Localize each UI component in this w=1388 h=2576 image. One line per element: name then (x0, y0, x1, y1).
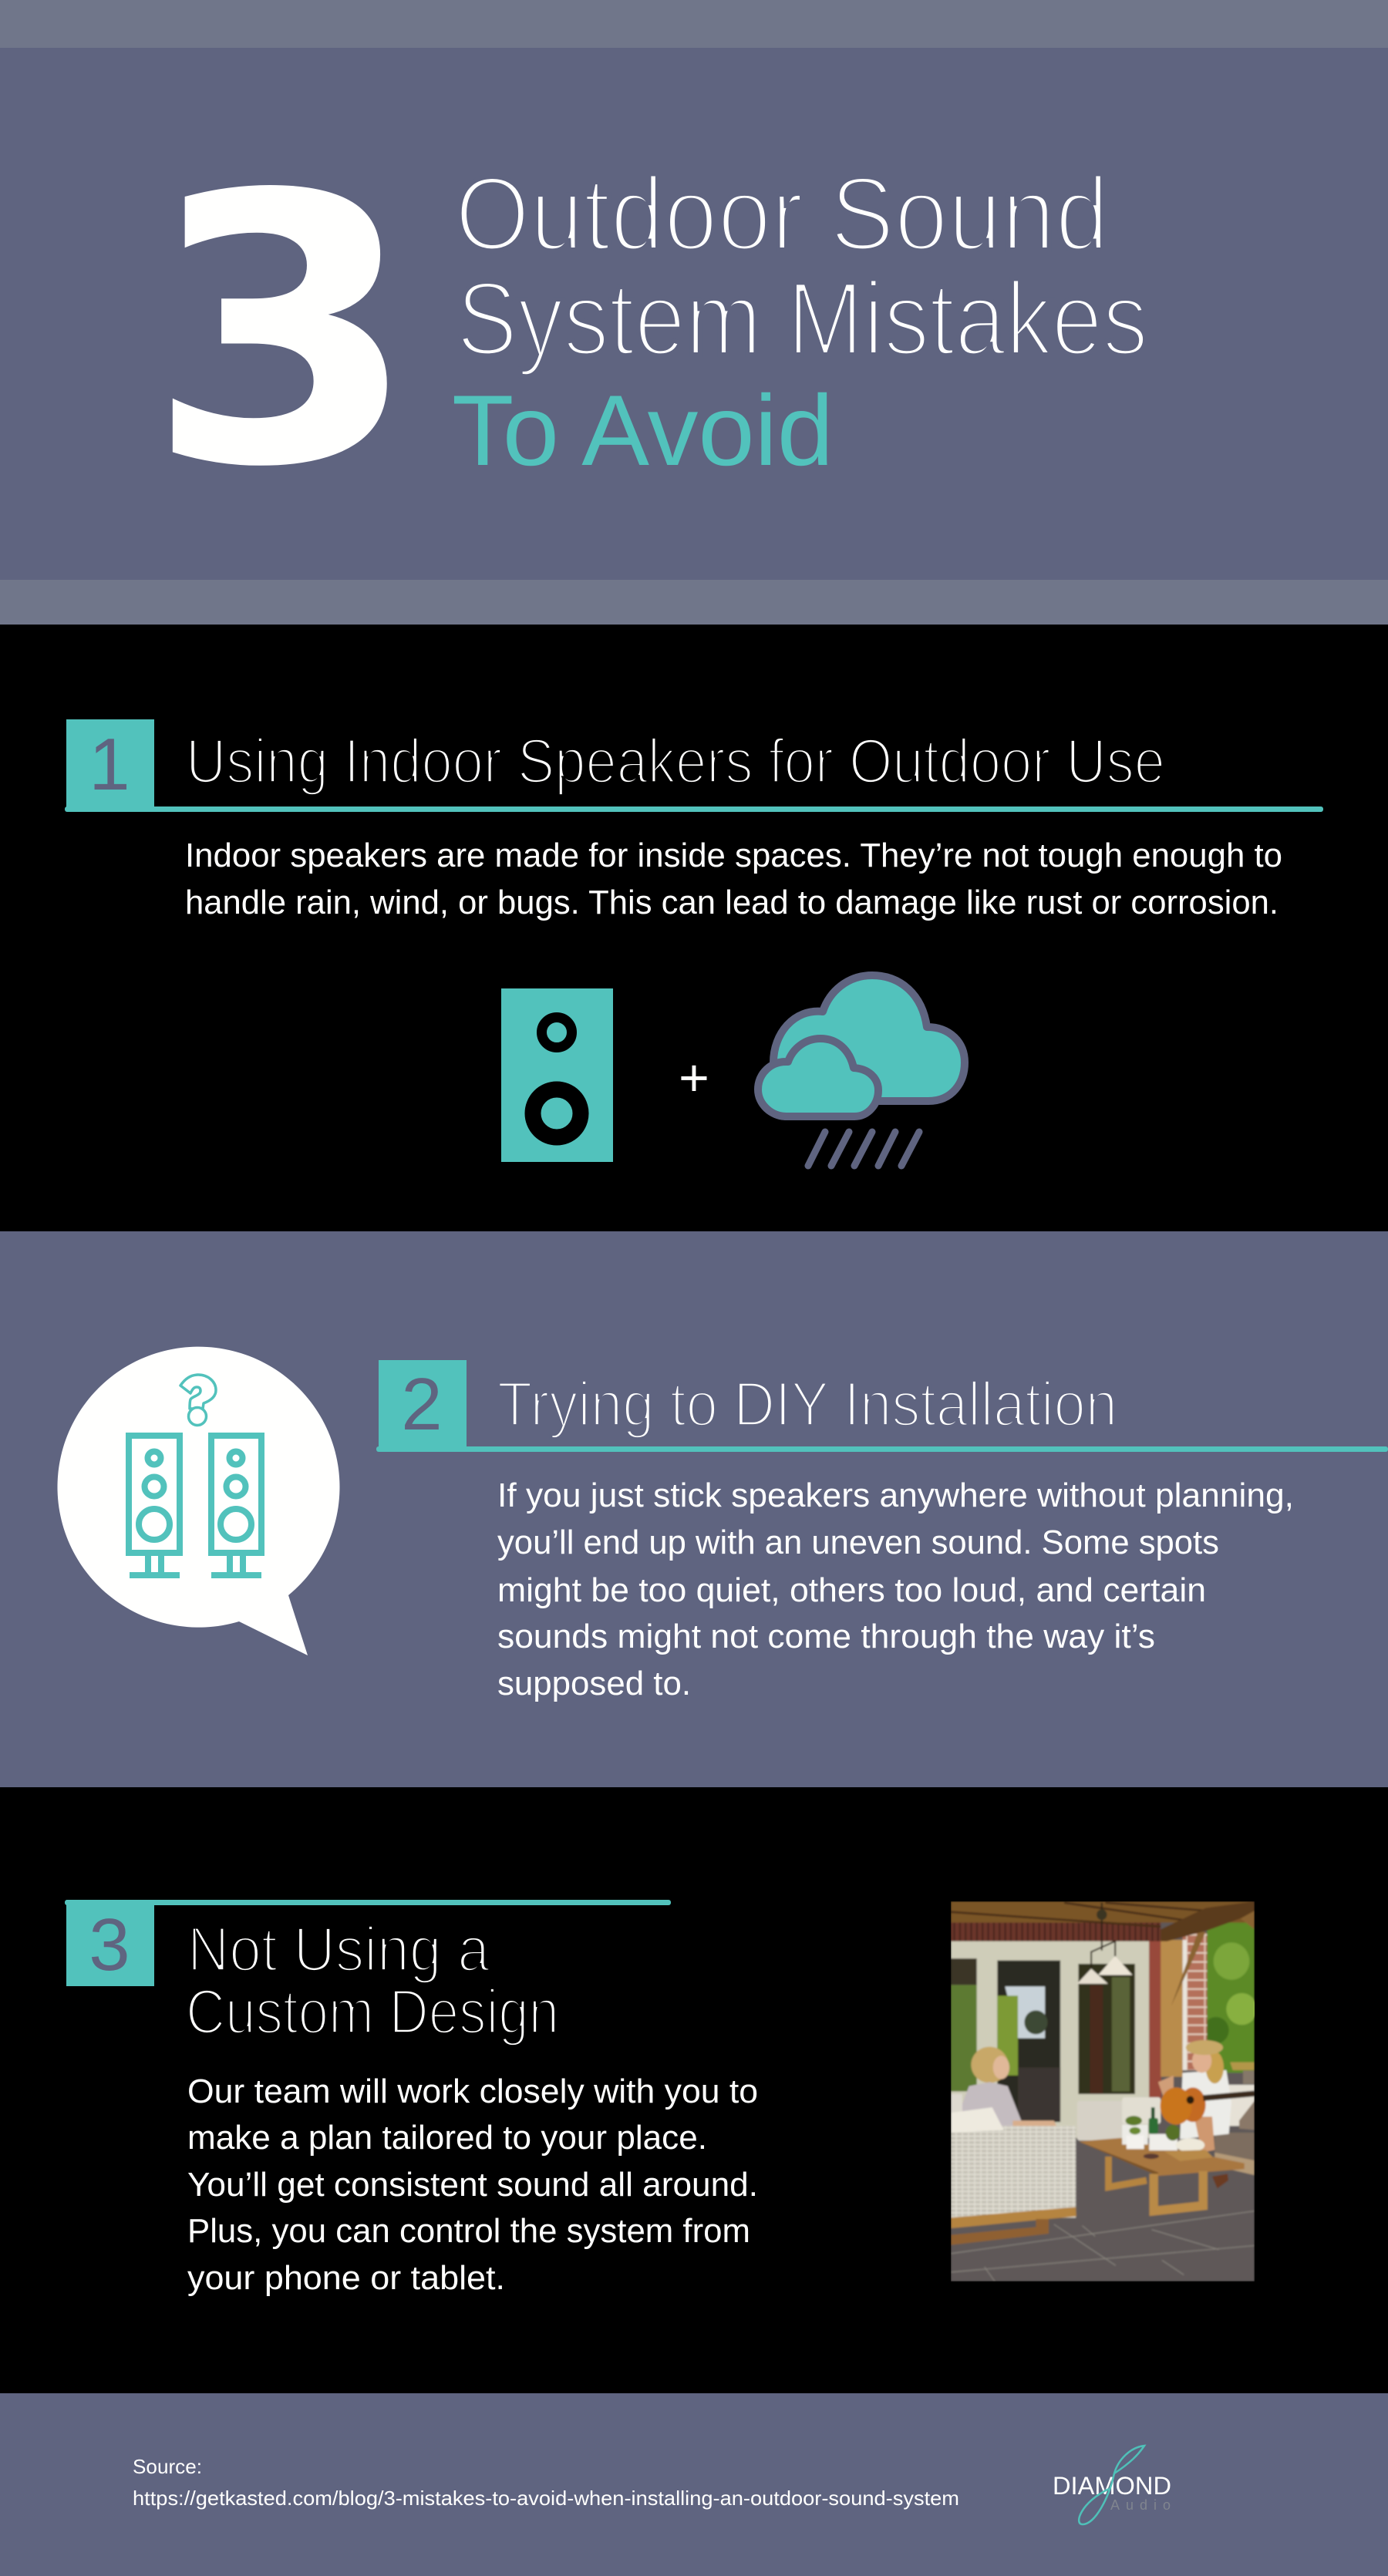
body text 1: handle rain, wind, or bugs. This can lead to damage like rust or corrosion. (185, 884, 1279, 921)
logo: Diamond J Audio (1053, 2446, 1171, 2524)
body text 1: Indoor speakers are made for inside spaces. They’re not tough enough to (185, 837, 1282, 874)
source text: Source: (133, 2455, 202, 2478)
heading 1: Using Indoor Speakers for Outdoor Use (186, 726, 1165, 796)
icon: speaker (501, 988, 613, 1162)
heading 2: Trying to DIY Installation (497, 1369, 1117, 1440)
icon: rain clouds (758, 975, 965, 1166)
number badge 2: 2 (401, 1363, 443, 1446)
heading rule 2 (376, 1446, 1388, 1452)
logo: Diamond J Audio: DIAMOND (1053, 2472, 1171, 2500)
body text 2: If you just stick speakers anywhere without planning, (497, 1477, 1294, 1514)
body text 3: You’ll get consistent sound all around. (187, 2166, 758, 2204)
panel: header (0, 0, 1388, 625)
title: To Avoid (452, 374, 834, 487)
number badge 1: 1 (89, 723, 130, 806)
heading 3: Not Using a (187, 1914, 490, 1985)
plus sign: + (679, 1049, 709, 1107)
title: System Mistakes (456, 260, 1148, 377)
body text 3: make a plan tailored to your place. (187, 2119, 707, 2157)
source text: https://getkasted.com/blog/3-mistakes-to-avoid-when-installing-an-outdoor-sound-system (133, 2487, 959, 2510)
number badge 1 (66, 719, 154, 807)
body text 3 (187, 2073, 758, 2297)
panel: mistake 2 (0, 1231, 1388, 1787)
heading rule 3 (65, 1900, 671, 1905)
source text (133, 2455, 959, 2510)
heading rule 1 (65, 806, 1323, 812)
icon: speech bubble with speakers (57, 1347, 339, 1655)
body text 2: might be too quiet, others too loud, and certain (497, 1571, 1206, 1609)
number badge 3: 3 (89, 1904, 130, 1986)
number badge 3 (66, 1900, 154, 1986)
body text 3: Our team will work closely with you to (187, 2073, 758, 2110)
body text 2 (497, 1477, 1294, 1702)
heading 3: Custom Design (186, 1977, 559, 2047)
photo: two women on a covered patio with a guitar (951, 1901, 1255, 2281)
logo: Diamond J Audio: Audio (1110, 2497, 1171, 2513)
panel: mistake 1 (0, 625, 1388, 1231)
title: Outdoor Sound (455, 155, 1109, 272)
big numeral 3: 3 (147, 117, 418, 548)
panel: mistake 3 (0, 1787, 1388, 2393)
number badge 2 (379, 1360, 467, 1447)
heading 3 (186, 1914, 559, 2047)
title (452, 155, 1148, 487)
body text 2: you’ll end up with an uneven sound. Some spots (497, 1524, 1219, 1561)
panel: footer (0, 2393, 1388, 2576)
body text 2: supposed to. (497, 1665, 691, 1702)
body text 1 (185, 837, 1282, 921)
body text 3: Plus, you can control the system from (187, 2212, 750, 2250)
body text 3: your phone or tablet. (187, 2259, 505, 2297)
body text 2: sounds might not come through the way it’s (497, 1618, 1155, 1655)
